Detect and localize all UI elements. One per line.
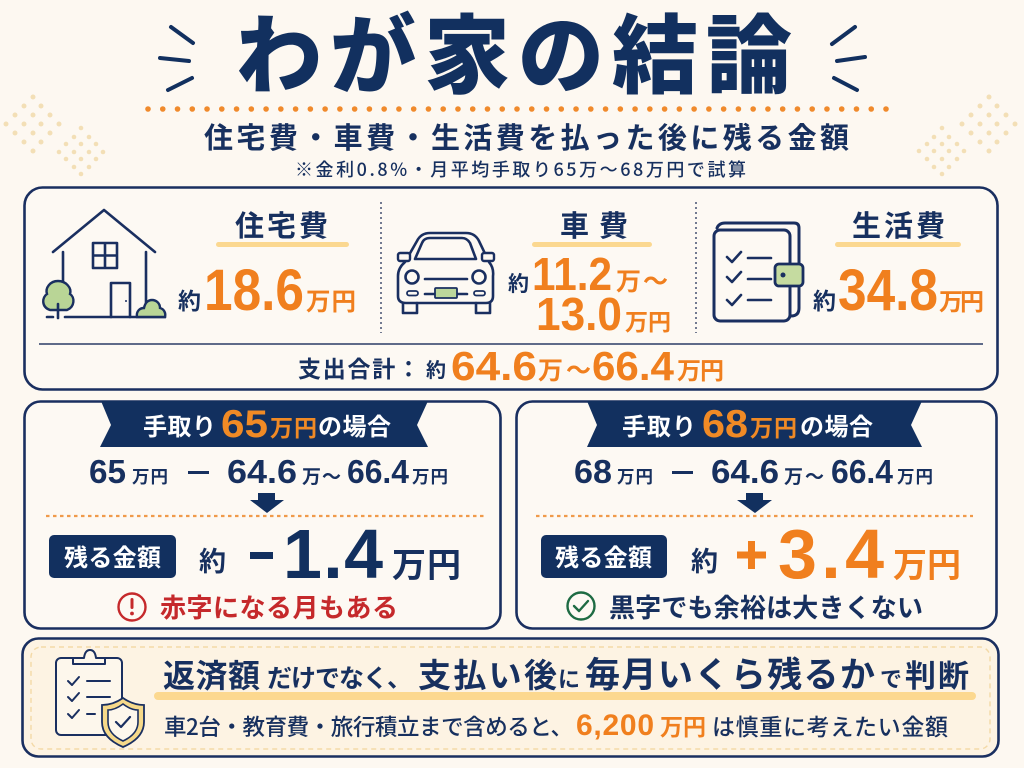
panel: take-home 65 (24, 401, 500, 628)
ribbon: take-home 65 (100, 401, 428, 447)
formula: 万円 (132, 464, 168, 489)
formula: 万円 (617, 464, 653, 489)
value: housing: 18.6 (204, 258, 304, 323)
formula: 万～ (784, 462, 824, 489)
value: car: 11.2 (532, 248, 612, 300)
total expenses: 66.4 (592, 343, 674, 389)
message headline: 支払い後 (418, 649, 557, 697)
label: remaining (541, 535, 667, 578)
formula: 64.6 (227, 453, 297, 490)
ribbon: take-home 68: の場合 (800, 407, 873, 442)
heading: car: 車費 (560, 203, 628, 245)
value: car: 万円 (625, 303, 671, 337)
icon: right burst lines (832, 27, 865, 90)
value: car: 約 (508, 268, 529, 298)
ribbon: take-home 65: 65 (221, 403, 268, 446)
result: plus 3.4: 約 (691, 540, 718, 579)
arrow (737, 493, 772, 513)
message headline: 返済額 (163, 651, 260, 697)
total expenses: 約 (426, 354, 446, 383)
result: plus 3.4 (691, 515, 961, 593)
formula: 64.6 (711, 453, 779, 490)
total expenses: 万円 (677, 351, 724, 386)
heading: living: 生活費 (852, 203, 945, 245)
message detail: 車2台・教育費・旅行積立まで含めると、 (164, 710, 573, 742)
formula (574, 453, 933, 490)
total expenses: 64.6 (451, 343, 537, 389)
formula: 万円 (897, 464, 933, 489)
ribbon: take-home 68: 万円 (750, 409, 797, 443)
label: remaining: 残る金額 (555, 538, 652, 573)
total expenses: 万～ (538, 351, 591, 387)
result: plus 3.4: 万円 (893, 538, 961, 587)
message headline: 判断 (905, 651, 969, 696)
heading: housing: 住宅費 (235, 203, 328, 245)
panel: monthly expenses (24, 188, 998, 390)
total expenses: 支出合計： (298, 350, 420, 384)
value: living: 万円 (939, 282, 984, 317)
message headline: で (880, 662, 902, 694)
note: ※金利0.8%・月平均手取り65万～68万円で試算 (295, 156, 746, 182)
ribbon: take-home 68 (587, 401, 922, 447)
value: living (813, 258, 984, 323)
message detail: 万円 (660, 708, 706, 742)
message headline: に (558, 662, 580, 694)
formula: 66.4 (347, 453, 410, 490)
panel: take-home 68 (516, 401, 996, 628)
icon: notebook (714, 223, 803, 321)
value: living: 約 (813, 282, 836, 316)
formula (89, 453, 448, 490)
label: remaining: 残る金額 (64, 538, 161, 573)
result: minus 1.4: 万円 (392, 538, 461, 587)
warning message: 赤字になる月もある (160, 588, 398, 625)
value: car: 万～ (616, 262, 668, 298)
message detail: 6,200 (576, 709, 654, 742)
subtitle: 住宅費・車費・生活費を払った後に残る金額 (204, 115, 849, 157)
formula: 万円 (412, 464, 448, 489)
ribbon: take-home 65: の場合 (318, 407, 391, 442)
message detail: は慎重に考えたい金額 (712, 708, 948, 742)
result: minus 1.4: 約 (199, 540, 226, 579)
result: minus 1.4: 1.4 (283, 515, 383, 593)
ribbon: take-home 68: 68 (702, 403, 748, 446)
result: plus 3.4: 3.4 (778, 515, 884, 593)
ribbon: take-home 65: 万円 (270, 409, 317, 443)
message headline: だけでなく、 (267, 659, 412, 695)
ribbon: take-home 65: 手取り (143, 407, 216, 442)
message detail (164, 708, 948, 742)
result: minus 1.4 (199, 515, 461, 593)
formula: 65 (89, 453, 126, 490)
icon: clipboard with shield (56, 650, 144, 747)
formula: 66.4 (831, 453, 894, 490)
total expenses (298, 343, 724, 389)
message headline (163, 647, 969, 698)
panel: conclusion (22, 638, 998, 756)
ribbon: take-home 68: 手取り (622, 407, 696, 442)
value: living: 34.8 (838, 258, 938, 323)
icon: car (398, 233, 494, 313)
message headline: 毎月いくら残るか (585, 647, 875, 698)
value: housing (178, 258, 356, 323)
icon: left burst lines (160, 27, 193, 90)
arrow (250, 493, 284, 513)
label: remaining (49, 535, 176, 578)
status message: 黒字でも余裕は大きくない (609, 588, 923, 625)
value: car: 13.0 (536, 288, 622, 340)
formula: 68 (574, 453, 612, 490)
formula: 万～ (302, 462, 341, 489)
value: housing: 約 (178, 282, 201, 316)
icon: house (43, 210, 165, 318)
value: housing: 万円 (306, 283, 356, 318)
value: car (508, 248, 671, 340)
